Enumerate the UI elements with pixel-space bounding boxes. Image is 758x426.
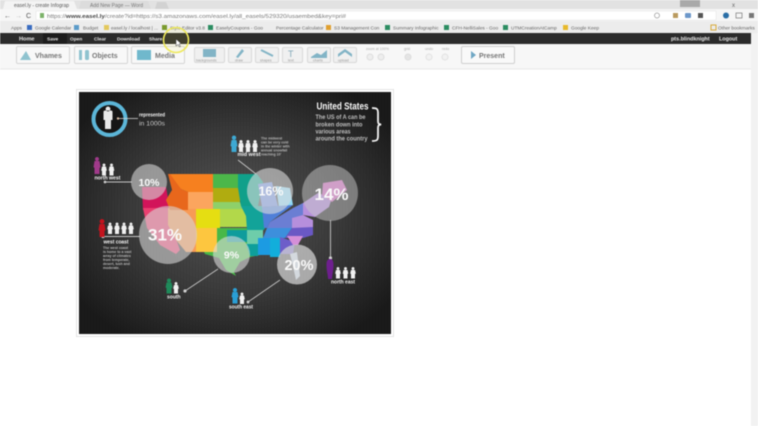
- button: shapes: [256, 48, 278, 62]
- group: north east: north east: [331, 280, 355, 286]
- group: west coast: moderate.: [103, 266, 120, 270]
- zoom and grid controls: redo: [442, 47, 449, 51]
- button: Vhames: [16, 46, 70, 64]
- bookmarks bar: Percentage Calculator: [276, 26, 324, 32]
- group: north west: [94, 157, 121, 182]
- bookmarks bar: S3 Management Con: [334, 26, 380, 32]
- address bar: C: [26, 13, 31, 20]
- icon: brace: [372, 108, 381, 141]
- button: text: [282, 48, 302, 62]
- group: south: south: [167, 294, 181, 300]
- circle: 9% south: 9%: [224, 250, 240, 262]
- address bar: https:// www.easel.ly /create?id=https://s3.amazonaws.com/easel.ly/all_easels/529320/usaembed&key=pri#: [47, 14, 347, 20]
- editor menu bar: Home: [19, 36, 35, 42]
- zoom and grid controls: [366, 47, 449, 60]
- group: west coast: [98, 219, 134, 270]
- editor menu bar: Logout: [719, 36, 737, 42]
- group: south east: [229, 288, 253, 310]
- group: west coast: The west coast: [103, 246, 129, 250]
- circle: 20% south east: [277, 244, 317, 284]
- editor menu bar: Open: [70, 36, 82, 42]
- group: mid west: mid west: [238, 152, 261, 158]
- button: Media: [132, 46, 184, 64]
- editor menu bar: Share: [149, 36, 163, 42]
- percentage circles: [131, 164, 358, 284]
- button: shapes: shapes: [260, 58, 272, 62]
- infographic panel: [79, 92, 391, 334]
- button: charts: charts: [313, 58, 323, 62]
- heading: United States: United States: [316, 102, 369, 112]
- group: south: [166, 278, 181, 300]
- editor menu bar: Download: [117, 36, 140, 42]
- circle: 16% mid west: 16%: [258, 184, 284, 198]
- bookmarks bar: Budget: [83, 26, 99, 32]
- heading: United States: The US of A can be: [316, 114, 366, 121]
- infographic frame: [76, 90, 394, 336]
- US map: [142, 174, 347, 280]
- group: west coast: desert, lush and: [103, 262, 130, 266]
- zoom and grid controls: zoom at 100%: [366, 47, 390, 51]
- circle: 10% north west: [131, 164, 167, 200]
- button: Present: [462, 46, 514, 64]
- heading: United States: broken down into: [316, 122, 362, 128]
- bookmarks bar: Google Keep: [571, 26, 599, 32]
- button: text: text: [288, 58, 294, 62]
- group: west coast: from temperate,: [103, 258, 129, 262]
- zoom and grid controls: grid: [404, 47, 410, 51]
- group: mid west: annual snowfall: [261, 148, 287, 152]
- button: Objects: Objects: [92, 53, 118, 60]
- button: draw: [228, 48, 252, 62]
- group: west coast: is home to a vast: [103, 250, 132, 254]
- bookmarks bar: [0, 21, 758, 33]
- cursor highlight: [164, 28, 188, 52]
- browser tab bar: easel.ly - create Infograp: [14, 3, 69, 9]
- bookmarks bar: easel.ly / localhost | ...: [111, 26, 158, 32]
- group: south east: south east: [229, 304, 253, 310]
- heading: United States: around the country: [316, 136, 368, 142]
- circle: 14% north east: [302, 165, 358, 221]
- browser tab bar: [0, 0, 758, 9]
- button: backgrounds: [194, 48, 224, 62]
- bookmarks bar: Other bookmarks: [718, 26, 755, 32]
- group: mid west: in the winter with: [261, 144, 290, 148]
- connector lines: [102, 160, 332, 303]
- button: upload: [334, 48, 356, 62]
- legend: represented in 1000s: represented: [139, 112, 165, 118]
- circle: 31% west coast: [139, 206, 197, 264]
- button: charts: [308, 48, 330, 62]
- bookmarks bar: UTMCreationAtCamp: [511, 26, 557, 32]
- group: mid west: [230, 136, 290, 158]
- browser tab bar: Add New Page — Word: [90, 3, 143, 9]
- circle: 31% west coast: 31%: [148, 226, 182, 244]
- group: north west: north west: [94, 176, 121, 182]
- bookmarks bar: Summary Infographic: [393, 26, 439, 32]
- editor toolbar: [0, 44, 751, 69]
- editor menu bar: Save: [47, 36, 59, 42]
- circle: 16% mid west: [247, 168, 293, 214]
- address bar: ←: [4, 13, 11, 20]
- legend: represented in 1000s: in 1000s: [139, 122, 165, 128]
- browser tab bar: x: [732, 3, 735, 9]
- legend: represented in 1000s: [94, 103, 165, 135]
- group: mid west: The midwest: [261, 136, 283, 140]
- circle: 20% south east: 20%: [284, 258, 314, 274]
- bookmarks bar: Apps: [11, 26, 23, 32]
- editor menu bar: [0, 33, 751, 44]
- button: Present: Present: [479, 53, 505, 60]
- bookmarks bar: CFH-NelliSales - Goo: [452, 26, 498, 32]
- editor menu bar: Clear: [94, 36, 106, 42]
- scrollbar: [751, 33, 758, 426]
- address bar: →: [15, 13, 22, 20]
- editor menu bar: pts.blindknight: [671, 36, 710, 42]
- group: north east: [326, 259, 356, 286]
- circle: 9% south: [213, 236, 250, 273]
- address bar: [0, 9, 758, 21]
- circle: 14% north east: 14%: [314, 185, 349, 204]
- button: upload: upload: [338, 58, 349, 62]
- bookmarks bar: Google Calendar: [35, 26, 72, 32]
- group: mid west: reaching 10': [261, 152, 281, 156]
- icon: ring with person: [94, 103, 126, 135]
- circle: 10% north west: 10%: [138, 177, 160, 189]
- button: backgrounds: backgrounds: [196, 58, 217, 62]
- button: Vhames: Vhames: [35, 53, 62, 60]
- group: west coast: array of climates: [103, 254, 131, 258]
- group: west coast: west coast: [103, 240, 129, 246]
- button: text: T: [288, 49, 294, 59]
- heading: United States: [316, 102, 381, 142]
- button: draw: draw: [235, 58, 243, 62]
- bookmarks bar: EaselyCoupons - Goo: [216, 26, 263, 32]
- group: mid west: can be very cold: [261, 140, 288, 144]
- heading: United States: various areas: [316, 128, 351, 136]
- button: Objects: [74, 46, 128, 64]
- button: Media: Media: [155, 53, 175, 60]
- zoom and grid controls: undo: [425, 47, 433, 51]
- bookmarks bar: Style Editor v3.8: [170, 26, 205, 32]
